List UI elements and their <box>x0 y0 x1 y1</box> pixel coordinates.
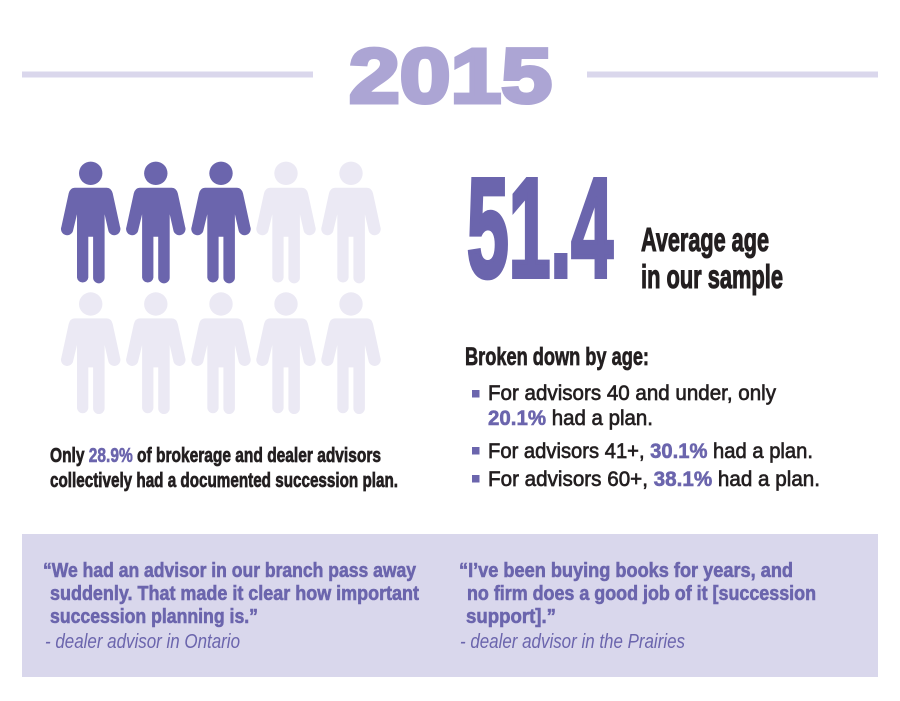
list item: 40 and under: For advisors 40 and under, only <box>488 382 776 405</box>
text: pictogram caption <box>50 445 398 492</box>
list item: 60+: For advisors 60+, 38.1% had a plan. <box>488 468 820 491</box>
quote: Prairies advisor <box>459 560 816 653</box>
quote: Prairies advisor: support].” <box>466 606 556 628</box>
quote: Ontario advisor: succession planning is.” <box>50 606 258 628</box>
quote: Prairies advisor: “I’ve been buying books for years, and <box>459 560 793 582</box>
list item: 41+: For advisors 41+, 30.1% had a plan. <box>488 440 813 463</box>
label: average age in our sample: Average age <box>641 221 769 258</box>
quote: Prairies advisor: - dealer advisor in the Prairies <box>460 631 685 653</box>
list: plan rates by age <box>472 382 820 491</box>
title: 2015 with rules: 2015 <box>349 34 552 120</box>
panel: quotes <box>22 534 878 677</box>
quote: Ontario advisor: suddenly. That made it clear how important <box>50 583 419 605</box>
heading: broken down by age: Broken down by age: <box>465 343 649 371</box>
label: average age in our sample: in our sample <box>641 258 783 295</box>
quote: Prairies advisor: no firm does a good job of it [succession <box>467 583 816 605</box>
list item: 40 and under <box>472 382 776 430</box>
text: pictogram caption: collectively had a documented succession plan. <box>50 470 398 492</box>
title: 2015 with rules <box>22 34 878 120</box>
big number: 51.4: 51.4 <box>467 148 613 306</box>
chart: pictogram of ten advisors, three highlighted <box>61 162 381 414</box>
quote: Ontario advisor: - dealer advisor in Ontario <box>45 631 240 653</box>
label: average age in our sample <box>641 221 783 295</box>
quote: Ontario advisor <box>43 560 419 653</box>
list item: 40 and under: 20.1% had a plan. <box>488 407 653 430</box>
quote: Ontario advisor: “We had an advisor in our branch pass away <box>43 560 417 582</box>
text: pictogram caption: Only 28.9% of brokerage and dealer advisors <box>50 445 381 467</box>
